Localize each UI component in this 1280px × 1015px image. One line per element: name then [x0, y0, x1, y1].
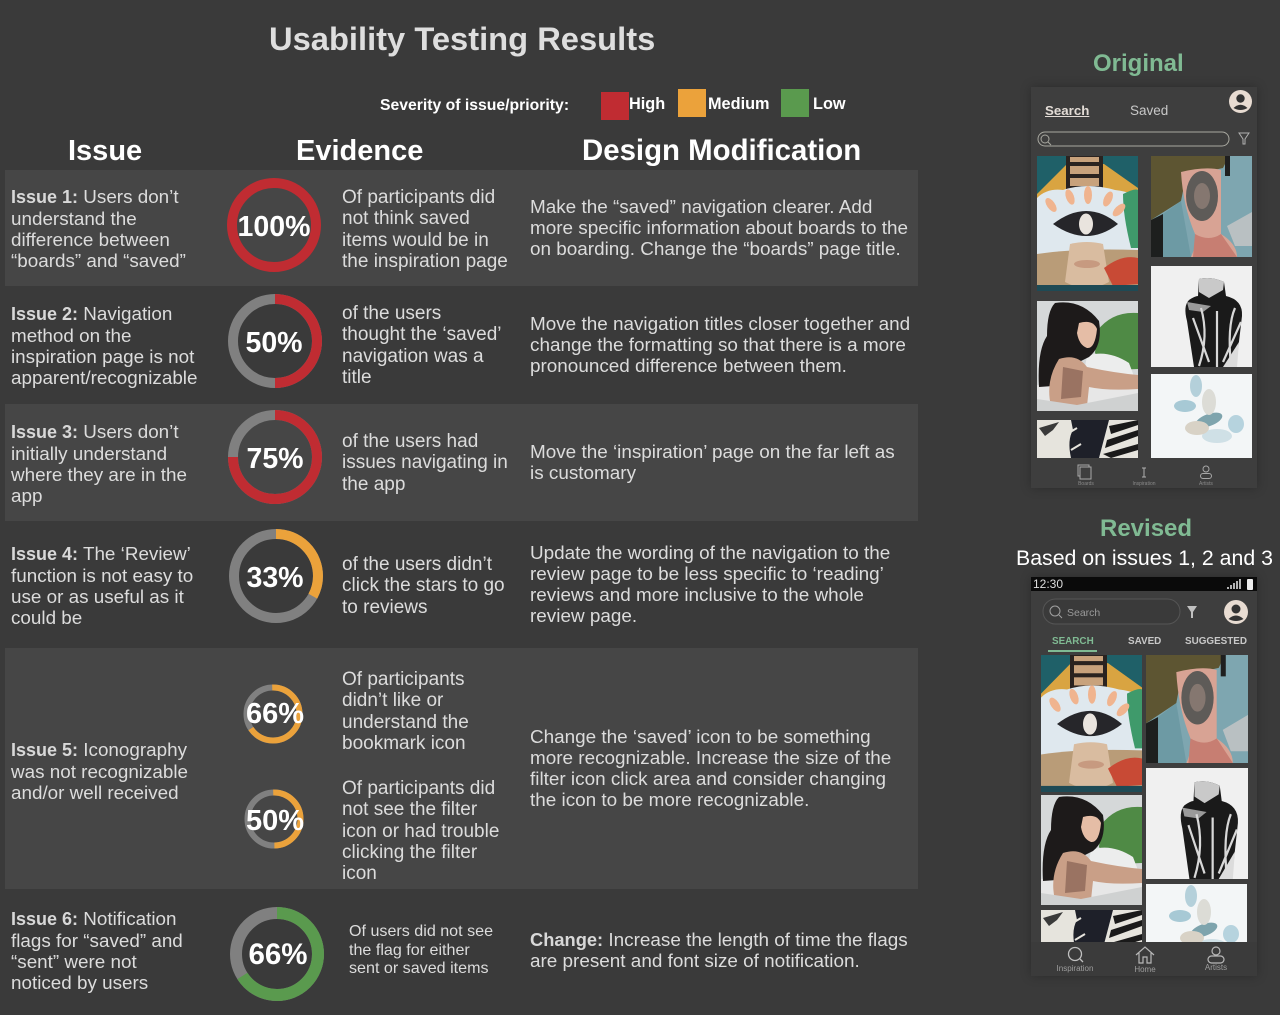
donut: 100% red: 100%	[238, 211, 310, 243]
evidence 2 text	[342, 303, 502, 388]
image: black tattoo	[1151, 266, 1252, 367]
issue 6 text: “sent” were not	[11, 951, 137, 972]
evidence 1 text	[342, 187, 508, 272]
evidence 2 text: of the users	[342, 303, 441, 324]
column heading: evidence: Evidence	[296, 135, 423, 167]
image: lion tattoo	[1146, 655, 1248, 763]
design modification 1 text	[530, 197, 908, 260]
nav label: saved: Saved	[1130, 103, 1168, 118]
evidence 3 text: of the users had	[342, 431, 478, 452]
design modification 1 text: Make the “saved” navigation clearer. Add	[530, 197, 872, 218]
evidence 6 text: the flag for either	[349, 941, 470, 959]
bottom nav: inspiration	[1132, 468, 1156, 487]
design modification 6 text: Change: Increase the length of time the flags	[530, 929, 908, 951]
status icons	[1227, 579, 1253, 590]
issue 3 text: Issue 3: Users don’t	[11, 421, 179, 442]
heading: revised: Revised	[1100, 515, 1192, 542]
design modification 4 text: review page.	[530, 606, 637, 627]
evidence 4 text: of the users didn’t	[342, 554, 492, 575]
issue 5 text	[11, 739, 188, 803]
donut: 33% orange: 33%	[246, 562, 304, 594]
evidence 6 text: Of users did not see	[349, 922, 493, 940]
issue 2 text: Issue 2: Navigation	[11, 303, 172, 324]
design modification 4 text: Update the wording of the navigation to the	[530, 543, 890, 564]
evidence 5b text	[342, 778, 499, 884]
issue 4 text: function is not easy to	[11, 565, 193, 586]
issue 4 text: use or as useful as it	[11, 586, 184, 607]
evidence 5b text: Of participants did	[342, 778, 495, 799]
issue 3 text	[11, 421, 187, 506]
evidence 6 text: sent or saved items	[349, 959, 489, 977]
legend: severity	[380, 89, 846, 120]
design modification 4 text	[530, 543, 890, 627]
donut: 66% orange: 66%	[246, 698, 304, 730]
image: floral tattoo	[1146, 884, 1247, 942]
subheading: based on issues: Based on issues 1, 2 and 3	[1016, 546, 1273, 570]
evidence 3 text: the app	[342, 474, 405, 494]
evidence 5a text	[342, 669, 469, 754]
design modification 5 text: filter icon click area and consider changing	[530, 769, 886, 790]
evidence 2 text: title	[342, 367, 372, 388]
evidence 5a text: Of participants	[342, 669, 464, 690]
issue 2 text	[11, 303, 197, 388]
status time: 12:30	[1033, 577, 1063, 591]
icon: filter	[1238, 132, 1250, 144]
evidence 1 text: the inspiration page	[342, 251, 508, 272]
donut: 66% orange	[244, 684, 304, 744]
issue 6 text: noticed by users	[11, 972, 148, 993]
issue 5 text: and/or well received	[11, 782, 179, 803]
tab: suggested: SUGGESTED	[1185, 636, 1247, 647]
design modification 5 text: Change the ‘saved’ icon to be something	[530, 727, 871, 748]
evidence 5b text: icon	[342, 863, 377, 884]
evidence 6 text	[349, 922, 493, 977]
donut: 75% red	[228, 410, 322, 504]
evidence 3 text: issues navigating in	[342, 452, 508, 473]
issue 1 text: Issue 1: Users don’t	[11, 186, 179, 207]
design modification 4 text: review page to be less specific to ‘reading’	[530, 564, 884, 585]
design modification 6 text	[530, 929, 908, 972]
issue 4 text	[11, 543, 193, 628]
design modification 2 text: Move the navigation titles closer together and	[530, 314, 910, 334]
evidence 2 text: thought the ‘saved’	[342, 324, 502, 345]
column heading: issue: Issue	[68, 135, 142, 167]
column heading: design modification: Design Modification	[582, 134, 861, 167]
legend text: high: High	[629, 95, 665, 113]
issue 1 text	[11, 186, 186, 271]
bottom nav: artists	[1199, 466, 1213, 487]
design modification 6 text: are present and font size of notification.	[530, 951, 860, 972]
legend text: low: Low	[813, 95, 846, 113]
evidence 5a text: understand the	[342, 712, 469, 732]
issue 6 text: Issue 6: Notification	[11, 908, 176, 929]
design modification 3 text: is customary	[530, 463, 636, 484]
image: zebra pattern	[1037, 420, 1138, 458]
legend swatch: high	[601, 92, 629, 120]
issue 1 text: understand the	[11, 208, 137, 229]
evidence 4 text: to reviews	[342, 596, 428, 618]
design modification 1 text: more specific information about boards to the	[530, 218, 908, 239]
issue 1 text: difference between	[11, 229, 170, 250]
image: zebra pattern	[1041, 910, 1142, 942]
tab: search: SEARCH	[1052, 636, 1094, 647]
nav: inspiration: Inspiration	[1057, 964, 1093, 973]
evidence 5b text: clicking the filter	[342, 842, 477, 863]
image: lion tattoo	[1151, 156, 1252, 257]
evidence 1 text: items would be in	[342, 230, 489, 250]
design modification 5 text: the icon to be more recognizable.	[530, 790, 809, 811]
icon: avatar	[1224, 600, 1248, 624]
donut: 50% orange	[244, 790, 304, 848]
design modification 2 text: pronounced difference between them.	[530, 356, 847, 377]
issue 2 text: inspiration page is not	[11, 346, 194, 367]
issue 3 text: app	[11, 485, 42, 506]
donut: 50% orange: 50%	[246, 805, 304, 837]
evidence 4 text: click the stars to go	[342, 575, 505, 596]
bottom nav: artists: Artists	[1199, 481, 1213, 487]
image: eye collage	[1037, 156, 1138, 291]
donut: 66% green: 66%	[248, 938, 308, 971]
design modification 5 text: more recognizable. Increase the size of the	[530, 748, 891, 769]
evidence 2 text: navigation was a	[342, 346, 484, 366]
issue 3 text: initially understand	[11, 443, 167, 464]
tab underline	[1048, 650, 1097, 652]
image: black tattoo	[1146, 768, 1248, 879]
nav: inspiration	[1053, 945, 1097, 973]
issue 6 text	[11, 908, 183, 993]
heading: original: Original	[1093, 50, 1184, 77]
donut: 75% red: 75%	[246, 443, 304, 475]
evidence 1 text: not think saved	[342, 208, 470, 229]
row band 1	[5, 170, 918, 286]
evidence 5b text: not see the filter	[342, 799, 477, 820]
evidence 5a text: didn’t like or	[342, 690, 443, 711]
issue 6 text: flags for “saved” and	[11, 930, 183, 951]
issue 4 text: could be	[11, 607, 82, 628]
donut: 50% red: 50%	[245, 327, 303, 359]
image: tattooed woman	[1041, 795, 1142, 905]
row band 3	[5, 404, 918, 521]
legend swatch: medium	[678, 89, 706, 117]
design modification 3 text: Move the ‘inspiration’ page on the far left as	[530, 442, 895, 463]
issue 5 text: was not recognizable	[11, 761, 188, 782]
icon: avatar	[1229, 90, 1252, 113]
nav label: search: Search	[1045, 103, 1089, 118]
title: Usability Testing Results	[269, 20, 655, 57]
donut: 100% red	[227, 178, 321, 272]
bottom nav: boards: Boards	[1078, 481, 1094, 487]
search field	[1042, 598, 1182, 626]
panel: original phone	[1031, 87, 1257, 488]
legend text: medium: Medium	[708, 95, 770, 113]
donut: 33% orange	[229, 529, 323, 623]
bottom nav bar	[1031, 942, 1257, 976]
search field: Search	[1067, 607, 1100, 619]
legend label: Severity of issue/priority:	[380, 97, 569, 114]
nav: home: Home	[1134, 965, 1156, 974]
evidence 5b text: icon or had trouble	[342, 820, 499, 842]
bottom nav: inspiration: Inspiration	[1132, 481, 1156, 487]
donut: 66% green	[230, 907, 324, 1001]
issue 5 text: Issue 5: Iconography	[11, 739, 187, 760]
issue 4 text: Issue 4: The ‘Review’	[11, 543, 191, 564]
design modification 4 text: reviews and more inclusive to the whole	[530, 585, 864, 606]
nav: home	[1123, 946, 1167, 974]
legend swatch: low	[781, 89, 809, 117]
row band 5	[5, 648, 918, 889]
evidence 1 text: Of participants did	[342, 187, 495, 208]
design modification 2 text: change the formatting so that there is a more	[530, 335, 906, 356]
donut: 50% red	[228, 294, 322, 388]
design modification 3 text	[530, 442, 895, 484]
tab: saved: SAVED	[1128, 636, 1161, 647]
image: floral tattoo	[1151, 374, 1252, 458]
image: tattooed woman	[1037, 301, 1138, 411]
icon: filter solid	[1186, 605, 1198, 619]
status bar	[1031, 577, 1257, 591]
panel: revised phone	[1031, 577, 1257, 976]
design modification 5 text	[530, 727, 891, 811]
issue 1 text: “boards” and “saved”	[11, 250, 186, 271]
design modification 1 text: on boarding. Change the “boards” page title.	[530, 239, 901, 260]
evidence 3 text	[342, 431, 508, 494]
evidence 4 text	[342, 554, 505, 618]
issue 3 text: where they are in the	[11, 464, 187, 485]
bottom nav: boards	[1078, 464, 1094, 487]
issue 2 text: method on the	[11, 325, 131, 346]
image: eye collage	[1041, 655, 1142, 792]
design modification 2 text	[530, 314, 910, 377]
evidence 5a text: bookmark icon	[342, 733, 466, 754]
nav: artists	[1194, 945, 1238, 973]
nav: artists: Artists	[1205, 963, 1227, 972]
issue 2 text: apparent/recognizable	[11, 367, 197, 388]
search bar	[1038, 132, 1230, 146]
